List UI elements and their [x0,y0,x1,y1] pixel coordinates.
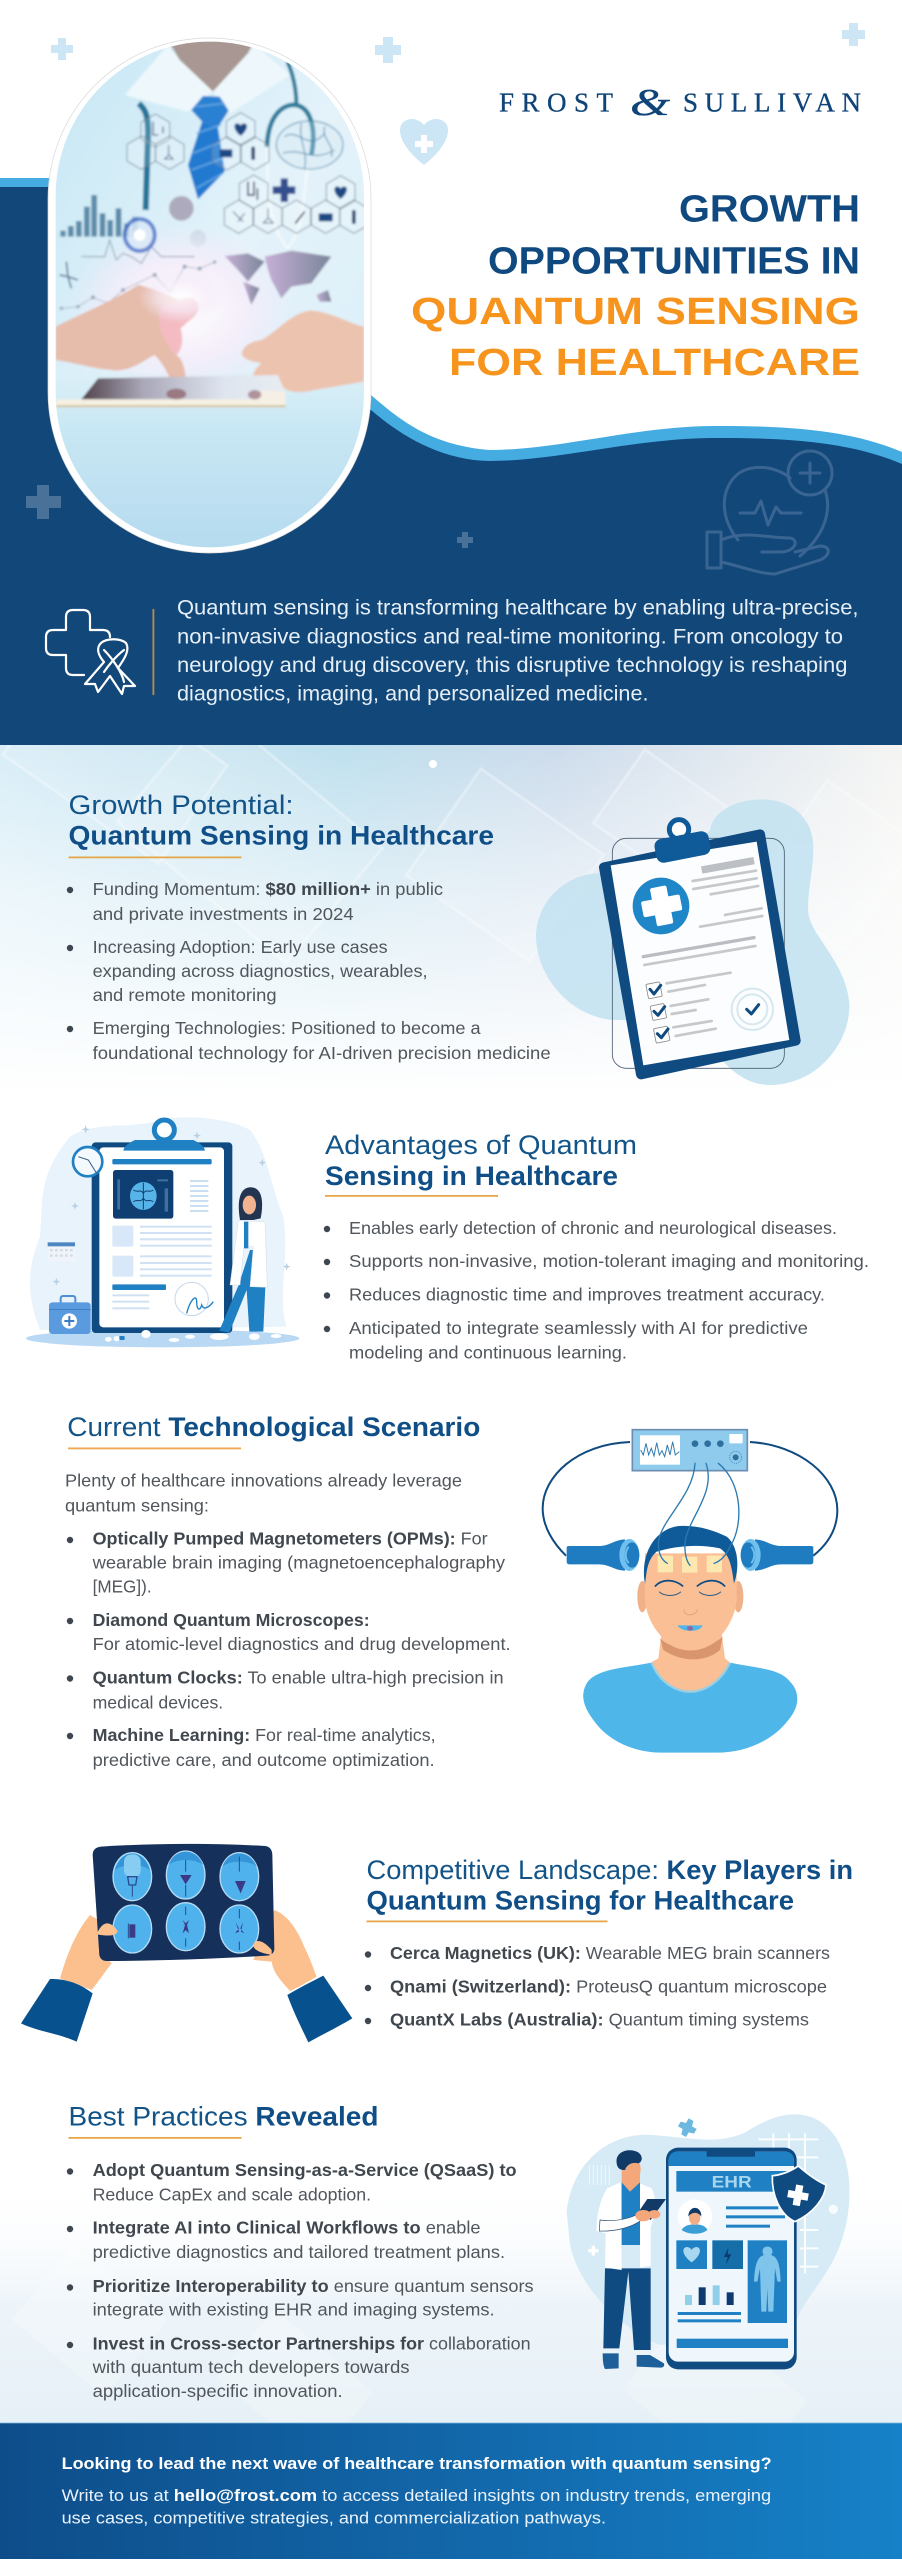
bullet list: growth potential: and remote monitoring [93,985,277,1005]
panel: best practices [67,2102,534,2401]
page background: top abstract gradient [0,656,902,1095]
illustration: doctor with EHR phone [567,2114,850,2369]
bullet list: growth potential: Emerging Technologies: Positioned to become a [93,1018,481,1038]
bullet list: scenario technologies: Diamond Quantum Microscopes: [93,1610,370,1630]
title: GROWTH [679,188,860,230]
text block: intro: non-invasive diagnostics and real-time monitoring. From oncology to [177,624,843,648]
heading: current technological scenario: Current Technological Scenario [67,1412,480,1442]
bullet list: best practices: Invest in Cross-sector Partnerships for collaboration [93,2334,531,2354]
illustration: hands holding brain scans [21,1844,352,2042]
heading: competitive landscape: Quantum Sensing for Healthcare [366,1885,794,1915]
text block: intro: diagnostics, imaging, and personalized medicine. [177,682,648,706]
bullet list: advantages: Supports non-invasive, motion-tolerant imaging and monitoring. [349,1251,869,1271]
bullet list: advantages [324,1218,869,1362]
bullet list: scenario technologies: predictive care, and outcome optimization. [93,1750,435,1770]
heading: competitive landscape: Competitive Landscape: Key Players in [366,1855,853,1885]
bullet list: key players [365,1943,830,2030]
divider: intro accent line [152,609,154,695]
bullet list: growth potential: expanding across diagnostics, wearables, [93,961,428,981]
illustration: doctor with medical report [26,1117,299,1347]
bullet list: advantages: Enables early detection of chronic and neurological diseases. [349,1218,837,1238]
heading: growth potential: Growth Potential: [68,790,294,820]
text block: scenario intro: quantum sensing: [65,1495,209,1515]
title [411,188,860,384]
photo: doctor in pill frame [48,38,373,553]
illustration: medical clipboard [536,799,849,1085]
icon: cross and ribbon [46,610,135,694]
decoration: faint plus signs on blue [26,485,473,548]
title: OPPORTUNITIES IN [488,240,860,282]
heading: advantages [325,1130,637,1197]
bullet list: best practices [67,2160,534,2401]
bullet list: scenario technologies: Quantum Clocks: To enable ultra-high precision in [93,1668,504,1688]
logo: Frost & Sullivan: FROST [499,88,614,118]
bullet list: growth potential: Increasing Adoption: Early use cases [93,937,388,957]
title: QUANTUM SENSING [411,291,860,333]
bullet list: scenario technologies: [MEG]). [93,1577,152,1597]
bullet list: best practices: Prioritize Interoperability to ensure quantum sensors [93,2276,534,2296]
bullet list: key players: Cerca Magnetics (UK): Wearable MEG brain scanners [390,1943,830,1963]
bullet list: scenario technologies: wearable brain imaging (magnetoencephalography [92,1553,505,1573]
bullet list: growth potential: Funding Momentum: $80 million+ in public [93,879,443,899]
bullet list: best practices: with quantum tech developers towards [92,2357,410,2377]
illustration: head with quantum sensor device [543,1430,837,1753]
heading: advantages: Advantages of Quantum [325,1130,637,1160]
text: footer question: Looking to lead the next wave of healthcare transformation with quantum sensing? [62,2454,772,2473]
bullet list: best practices: Adopt Quantum Sensing-as-a-Service (QSaaS) to [93,2160,517,2180]
decoration: light plus signs and heart [51,23,865,165]
bullet list: best practices: application-specific innovation. [93,2381,343,2401]
logo: Frost & Sullivan: & [630,82,671,124]
icon: heart in hand [707,451,832,574]
text block: intro: neurology and drug discovery, this disruptive technology is reshaping [177,653,848,677]
heading: best practices: Best Practices Revealed [68,2102,378,2132]
bullet list: growth potential: and private investments in 2024 [93,904,354,924]
panel: call to action footer [0,2422,902,2559]
heading: growth potential: Quantum Sensing in Healthcare [68,820,494,850]
bullet list: key players: Qnami (Switzerland): ProteusQ quantum microscope [390,1976,827,1996]
header wave: dark blue band [0,178,902,745]
title: FOR HEALTHCARE [449,342,860,384]
panel: current technological scenario [65,1412,511,1770]
heading: growth potential [68,790,494,858]
logo: Frost & Sullivan: SULLIVAN [683,88,861,118]
bullet list: scenario technologies: Optically Pumped Magnetometers (OPMs): For [93,1529,488,1549]
bullet list: advantages: Reduces diagnostic time and improves treatment accuracy. [349,1284,825,1304]
panel: growth potential [67,790,551,1063]
bullet list: growth potential [67,879,551,1063]
panel: advantages [324,1130,869,1362]
text block: intro [177,596,858,706]
bullet list: best practices: integrate with existing EHR and imaging systems. [93,2300,495,2320]
heading: competitive landscape [366,1855,853,1922]
text: footer body [62,2486,771,2528]
heading: advantages: Sensing in Healthcare [325,1161,618,1191]
bullet list: key players: QuantX Labs (Australia): Quantum timing systems [390,2010,809,2030]
text block: intro: Quantum sensing is transforming healthcare by enabling ultra-precise, [177,596,858,620]
logo: Frost & Sullivan [499,82,861,124]
bullet list: best practices: Integrate AI into Clinical Workflows to enable [93,2218,481,2238]
text block: scenario intro [65,1470,462,1515]
bullet list: scenario technologies: medical devices. [93,1692,223,1712]
page background: bottom abstract gradient [0,2180,902,2485]
bullet list: best practices: Reduce CapEx and scale adoption. [93,2185,371,2205]
illustration: doctor with EHR phone: EHR [712,2173,752,2192]
bullet list: advantages: Anticipated to integrate seamlessly with AI for predictive [349,1318,808,1338]
text block: scenario intro: Plenty of healthcare innovations already leverage [65,1470,462,1490]
bullet list: scenario technologies: Machine Learning: For real-time analytics, [93,1725,436,1745]
text: footer body: Write to us at hello@frost.com to access detailed insights on industry trends, emerging [62,2486,771,2505]
panel: competitive landscape [365,1855,853,2030]
bullet list: scenario technologies: For atomic-level diagnostics and drug development. [93,1634,511,1654]
bullet list: scenario technologies [67,1529,511,1770]
bullet list: best practices: predictive diagnostics and tailored treatment plans. [93,2242,505,2262]
bullet list: advantages: modeling and continuous learning. [349,1342,627,1362]
bullet list: growth potential: foundational technology for AI-driven precision medicine [93,1043,551,1063]
text: footer body: use cases, competitive strategies, and commercialization pathways. [62,2509,606,2528]
